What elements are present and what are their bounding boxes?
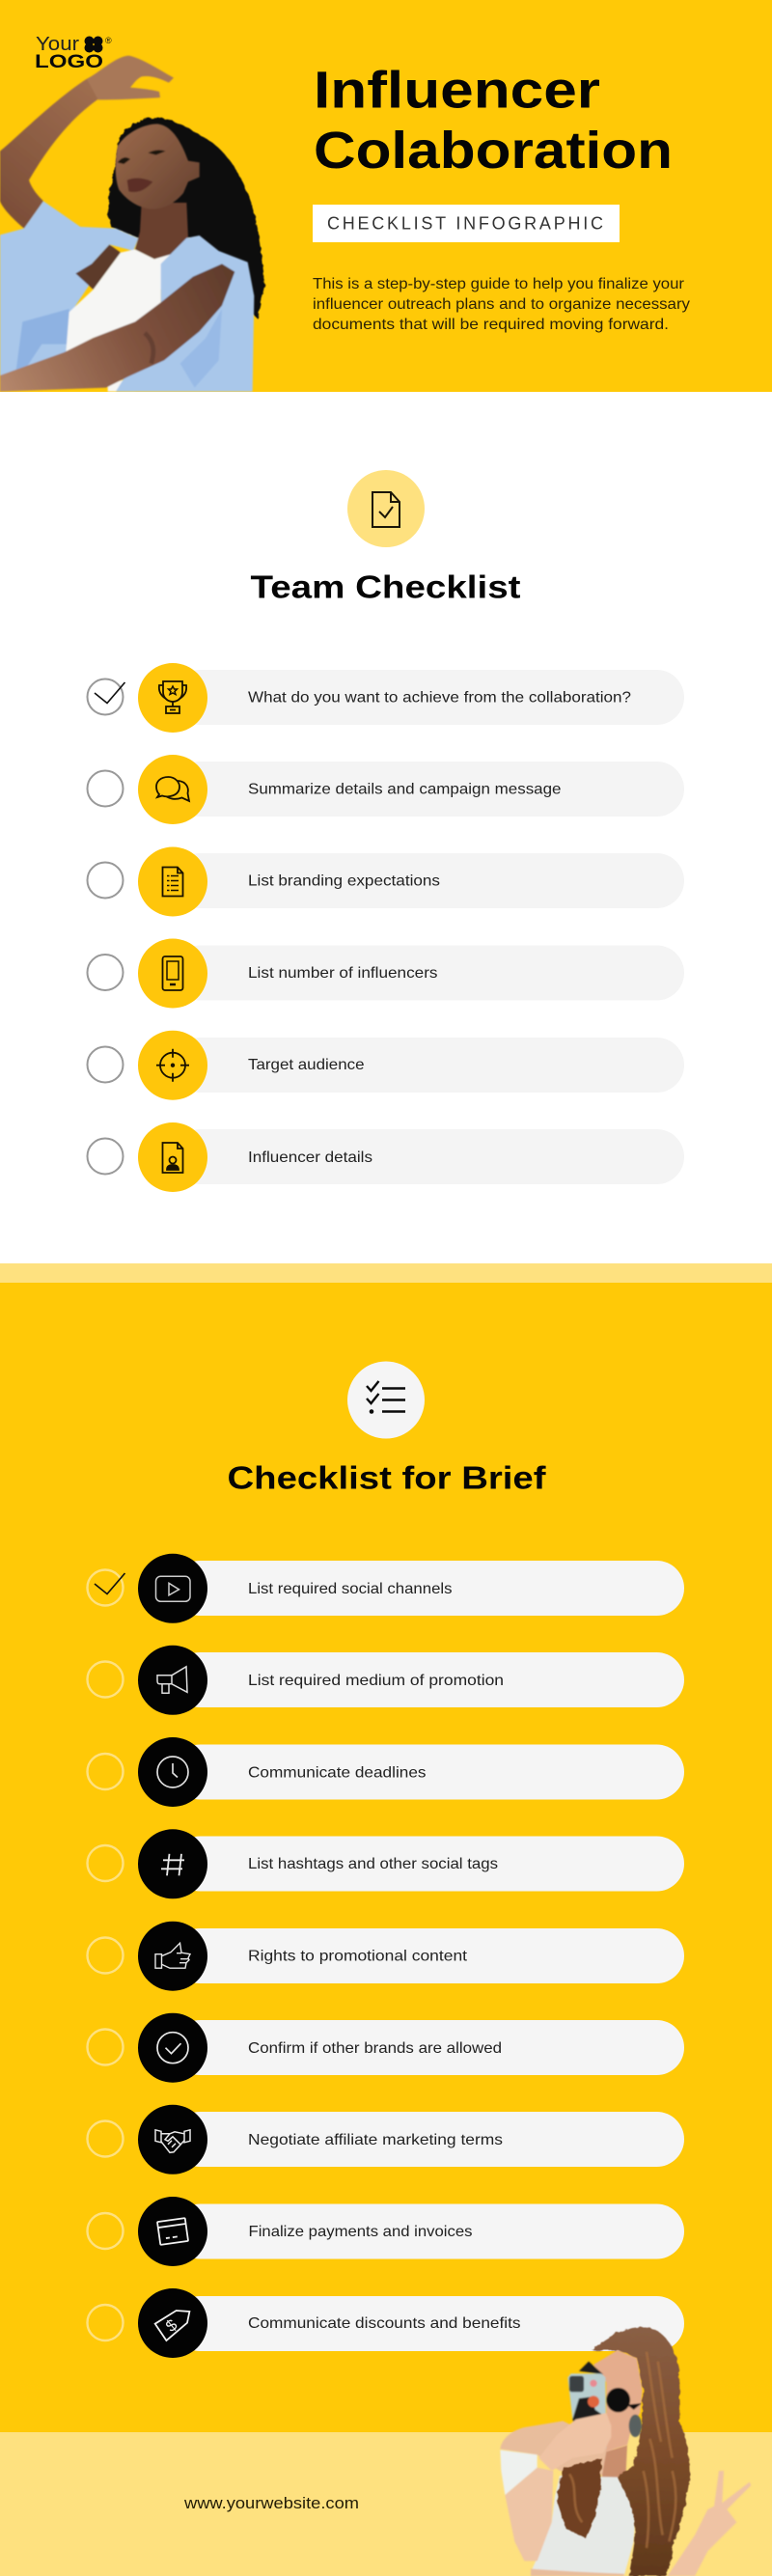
badge [138, 663, 207, 733]
photo: woman with phone [500, 2327, 751, 2576]
checkbox [87, 2305, 124, 2341]
icon: trophy [159, 681, 186, 713]
check mark [95, 1573, 125, 1594]
checkbox [87, 1754, 124, 1789]
item text: List hashtags and other social tags [248, 1856, 498, 1872]
icon: document with check [347, 470, 425, 547]
icon: credit card [157, 2218, 188, 2245]
checkbox [87, 2121, 124, 2156]
pill [173, 670, 684, 725]
pill [173, 762, 684, 817]
row: social channels [87, 1554, 684, 1623]
row: other brands [87, 2013, 684, 2083]
checkbox [87, 1662, 124, 1697]
pill [173, 1561, 684, 1616]
icon: clock [157, 1757, 188, 1787]
badge [138, 938, 207, 1008]
badge [138, 1737, 207, 1807]
badge [138, 2105, 207, 2174]
row: medium of promotion [87, 1646, 684, 1715]
row: number of influencers [87, 938, 684, 1008]
photo: woman in blue shirt [0, 56, 264, 392]
row: target audience [87, 1031, 684, 1100]
icon: target [156, 1049, 189, 1082]
row: deadlines [87, 1737, 684, 1807]
panel: team checklist [0, 392, 772, 1263]
item text: Communicate deadlines [248, 1764, 427, 1782]
row: branding [87, 847, 684, 917]
checkbox [87, 770, 124, 807]
icon: document list [162, 867, 183, 896]
icon: hash [161, 1854, 184, 1875]
item text: Communicate discounts and benefits [248, 2315, 521, 2332]
logo [35, 34, 112, 72]
logo word: Your: Your [36, 34, 79, 55]
item text: Finalize payments and invoices [249, 2224, 473, 2240]
row: promotional rights [87, 1922, 684, 1991]
icon: profile document [162, 1143, 183, 1173]
row: summarize [87, 755, 684, 824]
panel: footer [0, 2432, 772, 2576]
item text: List required medium of promotion [248, 1673, 504, 1689]
badge [138, 1554, 207, 1623]
pill [173, 946, 684, 1000]
item text: List required social channels [248, 1581, 452, 1597]
pill [173, 853, 684, 908]
pill [173, 2296, 684, 2351]
pill [173, 1652, 684, 1707]
checkbox [87, 955, 124, 990]
intro paragraph: documents that will be required moving forward. [313, 317, 669, 333]
pill [173, 2204, 684, 2258]
badge [138, 2013, 207, 2083]
pill [173, 1928, 684, 1983]
icon: price tag: $ [162, 2315, 181, 2336]
checkbox [87, 1139, 124, 1174]
subtitle label: CHECKLIST INFOGRAPHIC [327, 214, 603, 234]
checkbox [87, 1845, 124, 1881]
icon: handshake [155, 2130, 190, 2152]
item text: Target audience [248, 1057, 365, 1073]
row: achieve [87, 663, 684, 733]
website address: www.yourwebsite.com [183, 2494, 359, 2512]
icon: chat bubbles [156, 777, 189, 801]
checkbox checked [87, 1569, 124, 1606]
pill [173, 1038, 684, 1093]
checkbox [87, 863, 124, 898]
item text: Confirm if other brands are allowed [248, 2040, 502, 2057]
row: payments [87, 2197, 684, 2266]
pill [173, 1745, 684, 1799]
badge [138, 1829, 207, 1898]
icon: smartphone [162, 956, 183, 990]
pill [173, 1836, 684, 1892]
divider band [0, 1263, 772, 1283]
badge [138, 2197, 207, 2266]
checkbox [87, 1046, 124, 1083]
title [314, 62, 673, 180]
item text: What do you want to achieve from the collaboration? [248, 689, 631, 706]
heading: Checklist for Brief: Checklist for Brief [228, 1460, 547, 1496]
item text: Influencer details [248, 1150, 372, 1166]
intro paragraph: influencer outreach plans and to organize necessary [313, 296, 690, 313]
item text: Rights to promotional content [248, 1948, 468, 1965]
icon: video play [156, 1576, 190, 1601]
checkbox [87, 2029, 124, 2065]
badge [138, 1646, 207, 1715]
badge [138, 847, 207, 917]
row: influencer details [87, 1122, 684, 1192]
row: hashtags [87, 1829, 684, 1898]
icon: circled check [157, 2033, 188, 2064]
row: discounts [87, 2288, 684, 2358]
logo word: LOGO: LOGO [35, 51, 103, 72]
intro paragraph: This is a step-by-step guide to help you finalize your [313, 276, 685, 292]
badge [138, 2288, 207, 2358]
item text: Summarize details and campaign message [248, 782, 562, 797]
title: Colaboration [314, 122, 673, 180]
icon: megaphone [157, 1667, 187, 1693]
checkbox [87, 1938, 124, 1973]
badge [138, 1031, 207, 1100]
checkbox checked [87, 679, 124, 714]
check mark [95, 682, 125, 703]
intro paragraph [313, 276, 690, 333]
row: affiliate terms [87, 2105, 684, 2174]
logo clover [85, 37, 102, 52]
item text: List number of influencers [248, 965, 438, 982]
subtitle label [313, 205, 620, 242]
icon: checklist [347, 1361, 425, 1438]
icon: price tag [155, 2311, 189, 2341]
title: Influencer [314, 62, 600, 120]
badge [138, 1122, 207, 1192]
pill [173, 2020, 684, 2075]
pill [173, 1129, 684, 1184]
item text: Negotiate affiliate marketing terms [248, 2132, 503, 2148]
panel: header [0, 0, 772, 392]
badge [138, 1922, 207, 1991]
icon: thumbs up [155, 1943, 190, 1968]
checkbox [87, 2213, 124, 2249]
heading: Team Checklist: Team Checklist [251, 569, 521, 604]
panel: checklist for brief [0, 1283, 772, 2432]
item text: List branding expectations [248, 873, 440, 890]
badge [138, 755, 207, 824]
pill [173, 2112, 684, 2167]
logo registered mark: ® [105, 36, 112, 45]
